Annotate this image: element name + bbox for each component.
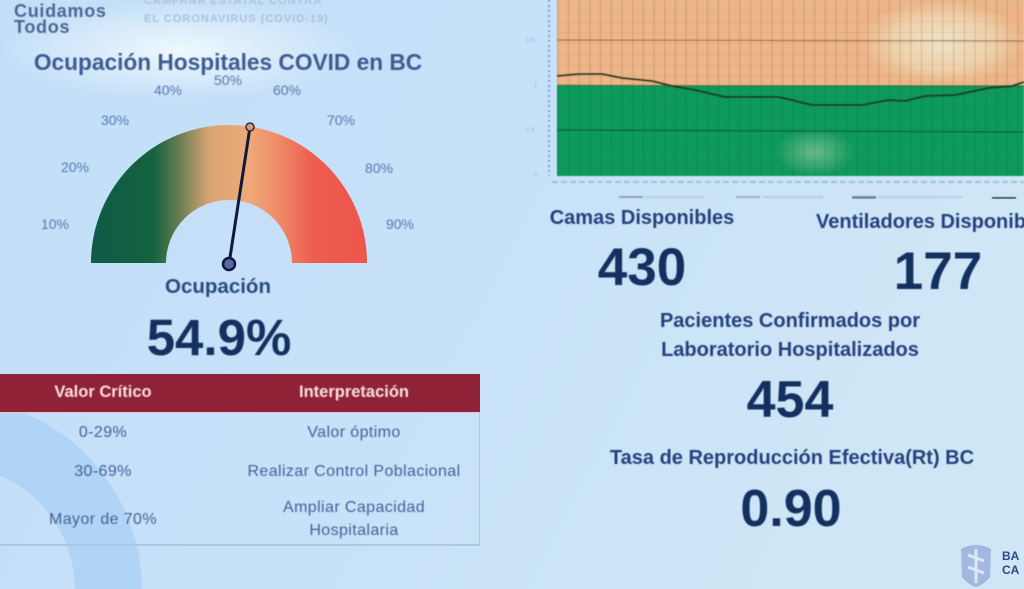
table rows: 30-69% — [74, 463, 132, 480]
stat: tasa de reproducción: 0.90 — [740, 480, 842, 538]
table rows: Hospitalaria — [309, 522, 399, 539]
gauge scale labels: 90% — [386, 216, 414, 232]
logo: Cuidamos Todos — [14, 1, 107, 37]
table rows: Mayor de 70% — [49, 511, 157, 528]
table header — [0, 374, 480, 413]
table header: Valor Crítico — [54, 383, 152, 401]
table rows: 0-29% — [79, 424, 127, 441]
stat: ventiladores disponibles — [816, 211, 1024, 299]
stat: tasa de reproducción: Tasa de Reproducción Efectiva(Rt) BC — [610, 447, 974, 469]
table rows: Realizar Control Poblacional — [247, 463, 461, 480]
table rows — [49, 424, 461, 540]
stat: pacientes confirmados: Pacientes Confirmados por — [660, 310, 920, 332]
gauge scale labels — [41, 72, 414, 232]
stat: tasa de reproducción — [609, 447, 974, 538]
y axis: 0 — [534, 173, 538, 179]
gauge scale labels: 30% — [101, 112, 129, 128]
gauge scale labels: 20% — [61, 159, 89, 175]
title: Ocupación Hospitales COVID en BC — [34, 49, 422, 75]
gauge scale labels: 60% — [273, 82, 301, 98]
table rows: Valor óptimo — [307, 424, 401, 441]
logo: Cuidamos Todos: Cuidamos — [14, 1, 107, 21]
Rt curve — [557, 74, 1024, 105]
table: critical values — [0, 374, 480, 546]
stat: camas disponibles: Camas Disponibles — [550, 207, 734, 229]
gauge needle — [223, 123, 254, 270]
gauge scale labels: 40% — [154, 82, 182, 98]
gauge arc — [91, 125, 367, 263]
stat: pacientes confirmados: 454 — [747, 371, 833, 429]
table header: Interpretación — [299, 383, 409, 401]
campaign header text — [144, 0, 329, 25]
x axis and legend — [552, 182, 1024, 199]
y axis: 1 — [534, 83, 538, 89]
logo: Baja California: CA — [1002, 563, 1019, 577]
logo: Baja California: BA — [1002, 549, 1019, 563]
y axis: 0.5 — [526, 128, 535, 134]
shield icon — [961, 545, 991, 587]
gauge scale labels: 10% — [41, 216, 69, 232]
campaign header text: EL CORONAVIRUS (COVID-19) — [144, 13, 329, 25]
stat: camas disponibles: 430 — [598, 238, 686, 297]
gauge label: Ocupación — [165, 275, 271, 298]
chart zones — [557, 0, 1024, 85]
occupancy value: 54.9% — [147, 309, 291, 366]
stat: pacientes confirmados — [660, 310, 920, 429]
y axis — [526, 0, 549, 179]
gauge scale labels: 70% — [327, 112, 355, 128]
stat: pacientes confirmados: Laboratorio Hospitalizados — [661, 339, 919, 361]
y axis: 1.5 — [526, 38, 535, 44]
table rows: Ampliar Capacidad — [283, 499, 425, 516]
logo: Cuidamos Todos: Todos — [14, 17, 70, 37]
gauge scale labels: 50% — [214, 72, 242, 88]
logo: Baja California — [961, 545, 1019, 587]
gauge scale labels: 80% — [365, 160, 393, 176]
stat: camas disponibles — [550, 207, 734, 297]
